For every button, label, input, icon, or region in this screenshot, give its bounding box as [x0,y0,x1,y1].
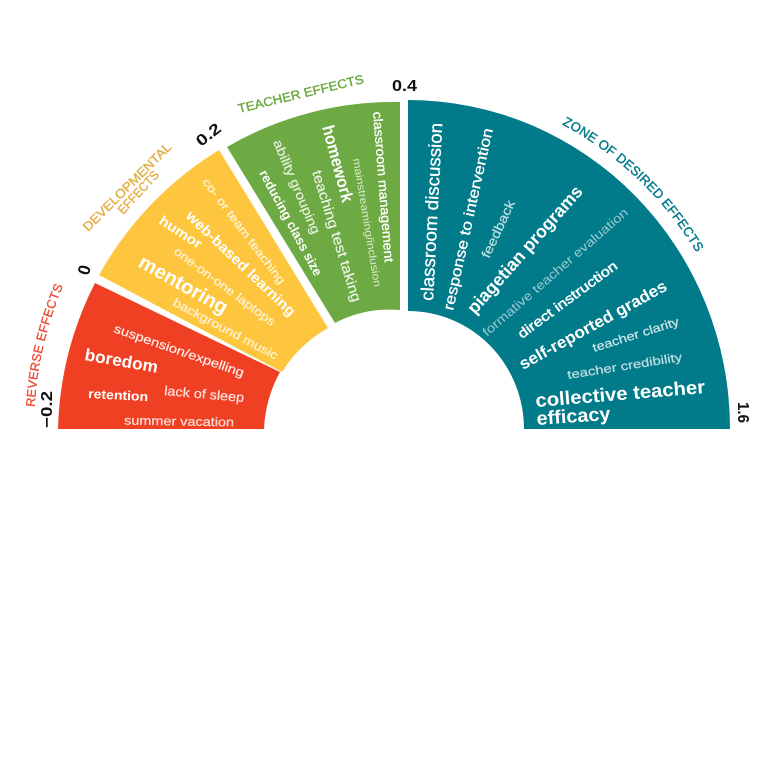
text: collective teacher efficacy: efficacy [536,404,612,430]
green wedge [227,102,400,323]
text: collective teacher efficacy: collective teacher [535,377,706,412]
red wedge [58,283,280,429]
text: one-on-one laptops: one-on-one laptops [171,244,278,329]
text: homework: homework [318,123,357,205]
scale label: 0: 0 [74,263,95,277]
text: mentoring: mentoring [135,251,232,319]
text: reducing class size: reducing class size [256,167,326,278]
text: classroom management: classroom management [370,111,397,263]
text: ability grouping: ability grouping [270,137,324,236]
text: co- or team teaching: co- or team teaching [200,177,287,287]
text: feedback: feedback [478,197,518,260]
text: mainstreaming/inclusion: mainstreaming/inclusion [350,158,383,288]
text: collective teacher efficacy [535,377,706,430]
text: boredom: boredom [83,345,159,377]
panel: developmental effects [99,150,328,372]
text: direct instruction: direct instruction [515,258,620,341]
heading: developmental effects: EFFECTS [115,168,162,217]
panel: zone of desired effects [408,100,730,430]
scale label: 0.4: 0.4 [392,78,417,95]
heading: zone of desired effects: ZONE OF DESIRED EFFECTS [562,116,704,252]
text: teaching test taking: teaching test taking [309,168,365,304]
text: summer vacation: summer vacation [124,414,234,429]
teal wedge [408,100,730,429]
text: background music: background music [171,295,280,363]
text: response to intervention: response to intervention [440,127,497,312]
panel: teacher effects [227,102,400,323]
text: teacher credibility: teacher credibility [566,350,683,382]
panel: reverse effects [58,283,280,429]
text: lack of sleep: lack of sleep [164,383,245,405]
text: formative teacher evaluation: formative teacher evaluation [480,205,631,339]
text: classroom discussion: classroom discussion [417,122,446,301]
scale label: 1.6: 1.6 [734,402,751,423]
heading: developmental effects: DEVELOPMENTAL [80,140,174,234]
text: web-based learning: web-based learning [181,208,298,320]
heading: teacher effects: TEACHER EFFECTS [236,72,365,116]
text: humor: humor [156,212,206,252]
scale label: -0.2: −0.2 [39,391,56,428]
text: suspension/expelling: suspension/expelling [112,322,246,380]
heading: reverse effects: REVERSE EFFECTS [26,284,62,406]
text: teacher clarity: teacher clarity [591,314,681,355]
text: retention: retention [88,386,149,404]
text: self-reported grades: self-reported grades [516,277,670,373]
text: piagetian programs: piagetian programs [463,182,587,318]
yellow wedge [99,150,328,372]
scale label: 0.2: 0.2 [193,120,225,150]
